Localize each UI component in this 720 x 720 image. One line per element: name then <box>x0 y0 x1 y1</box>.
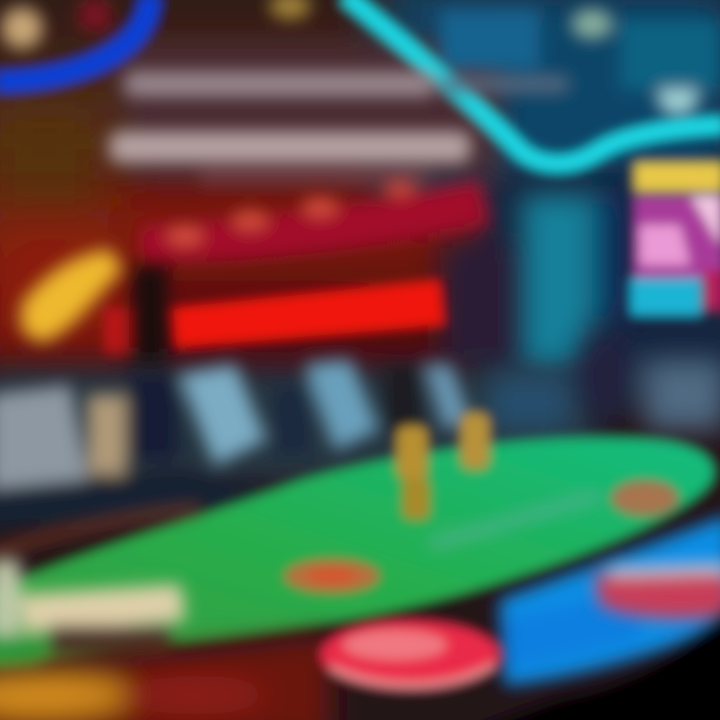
cyan neon line <box>345 0 720 164</box>
red poker chips right <box>595 568 720 618</box>
right neon panel <box>630 162 720 316</box>
teal column <box>522 190 626 375</box>
blue neon ring <box>0 0 150 82</box>
floor strip behind table <box>0 368 600 483</box>
blurred sign text lines <box>110 72 570 182</box>
dark corner <box>480 600 720 720</box>
dark pillar <box>132 265 168 375</box>
ceiling lights <box>2 0 720 115</box>
poker table <box>0 437 714 668</box>
yellow blob <box>22 250 122 342</box>
chairs <box>0 360 470 530</box>
red marquee band <box>140 180 490 262</box>
standing figures <box>396 412 490 520</box>
glowing red bar <box>104 280 445 354</box>
people and machines right <box>490 327 720 430</box>
cards at table edge <box>0 560 185 665</box>
red poker chips front <box>320 620 500 690</box>
lower table rim <box>0 635 330 720</box>
blue table edge <box>500 515 720 685</box>
